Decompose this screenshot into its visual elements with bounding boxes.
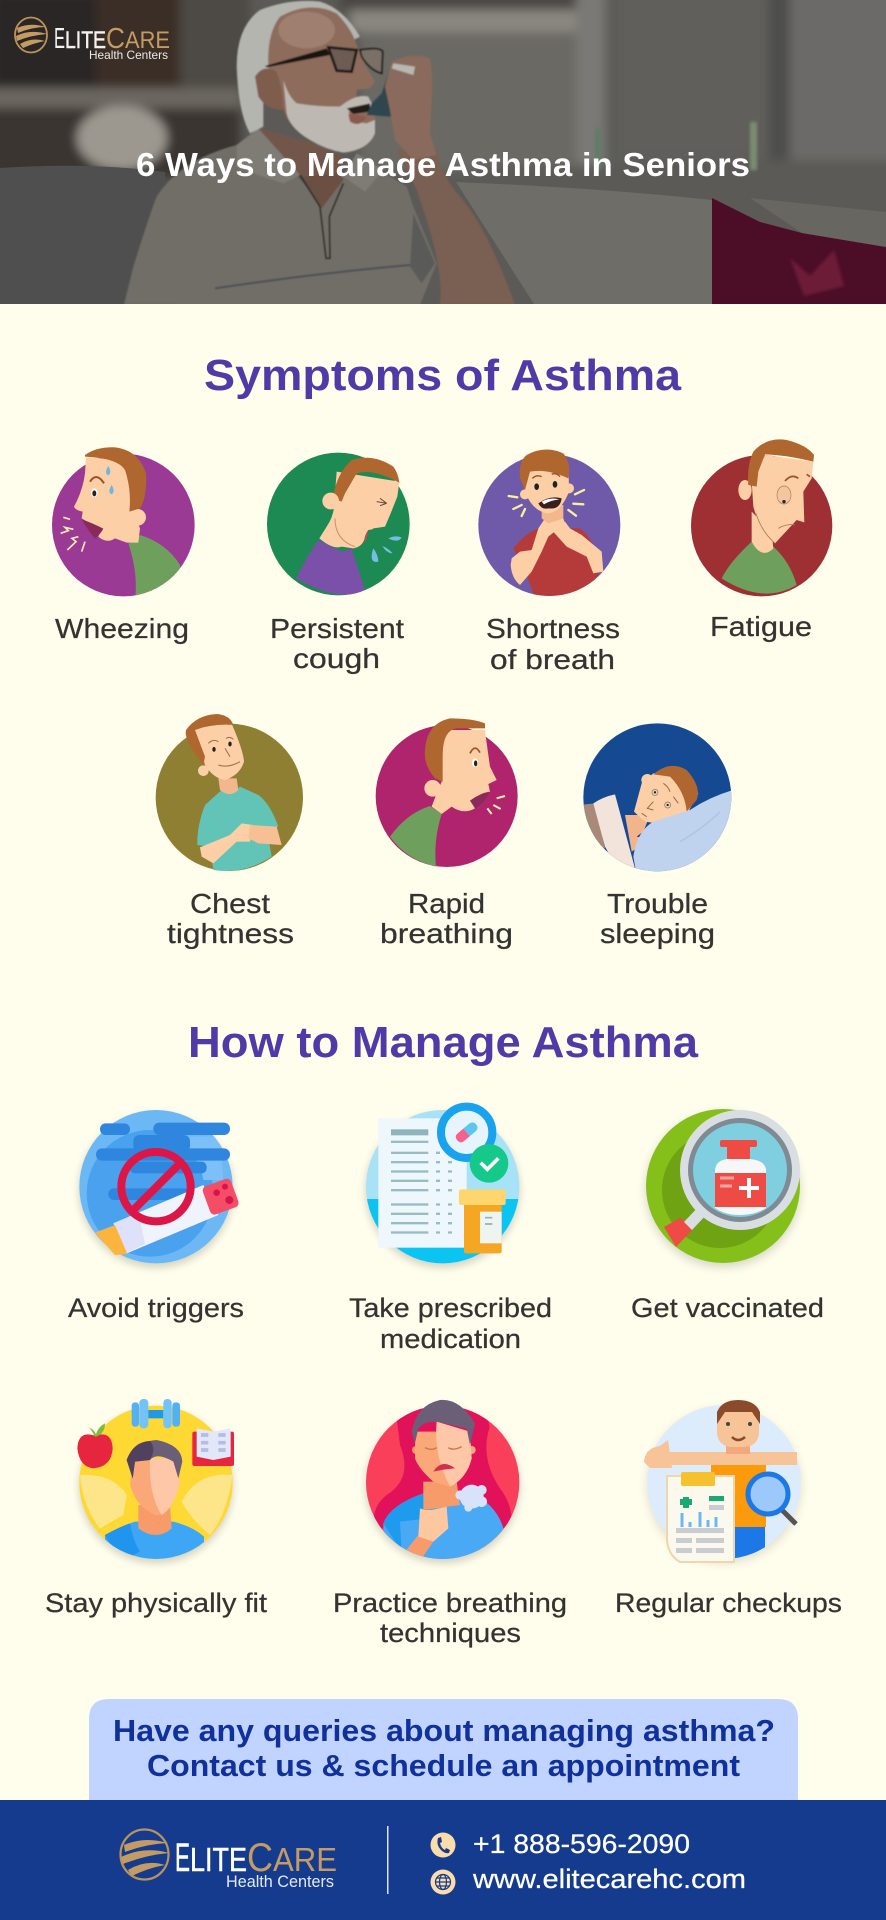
callout text: Contact us & schedule an appointment bbox=[147, 1748, 740, 1783]
logo: header EliteCare: ARE bbox=[125, 27, 170, 54]
phone number: +1 888-596-2090 bbox=[473, 1829, 690, 1859]
heading: How to Manage Asthma: How to Manage Asthma bbox=[188, 1018, 699, 1067]
logo: footer EliteCare: Health Centers bbox=[226, 1873, 334, 1891]
logo: footer EliteCare bbox=[120, 1830, 337, 1891]
logo: header EliteCare: LITE bbox=[65, 27, 106, 54]
symptom: shortness of breath bbox=[478, 450, 620, 675]
website: www.elitecarehc.com bbox=[472, 1864, 746, 1894]
label: Persistent cough: cough bbox=[293, 643, 380, 674]
tip: take prescribed medication bbox=[349, 1107, 552, 1354]
symptom: fatigue bbox=[691, 439, 832, 642]
callout: contact banner bbox=[89, 1699, 798, 1800]
logo: footer EliteCare: LITE bbox=[190, 1841, 247, 1878]
tip: regular checkups bbox=[615, 1400, 842, 1618]
label: Shortness of breath: of breath bbox=[490, 644, 615, 675]
tip: practice breathing techniques bbox=[333, 1400, 567, 1648]
label: Persistent cough: Persistent bbox=[270, 613, 404, 644]
icon: panting man bbox=[376, 718, 518, 867]
icon: man breathing bbox=[365, 1400, 520, 1564]
label: Fatigue: Fatigue bbox=[710, 611, 812, 642]
symptom: trouble sleeping bbox=[580, 723, 733, 949]
icon: coughing man bbox=[267, 453, 410, 595]
logo: header EliteCare: C bbox=[106, 23, 125, 55]
label: Trouble sleeping: sleeping bbox=[600, 918, 715, 949]
logo: footer EliteCare: E bbox=[175, 1836, 190, 1880]
label: Get vaccinated: Get vaccinated bbox=[631, 1293, 824, 1323]
label: Stay physically fit: Stay physically fit bbox=[45, 1588, 268, 1618]
tip: stay physically fit bbox=[45, 1399, 268, 1618]
label: Wheezing: Wheezing bbox=[55, 613, 189, 644]
logo: footer EliteCare: ARE bbox=[273, 1841, 337, 1878]
label: Practice breathing techniques: techniques bbox=[380, 1618, 521, 1648]
label: Regular checkups: Regular checkups bbox=[615, 1588, 842, 1618]
icon: tired man bbox=[691, 439, 832, 596]
icon: man with clipboard and magnifier bbox=[644, 1400, 801, 1565]
icon: wheezing man bbox=[52, 447, 195, 600]
callout text: Have any queries about managing asthma? bbox=[113, 1713, 775, 1748]
icon: sleepless man in bed bbox=[580, 723, 733, 875]
symptom: persistent cough bbox=[267, 453, 410, 674]
logo: header EliteCare: Health Centers bbox=[89, 48, 168, 62]
label: Avoid triggers: Avoid triggers bbox=[68, 1293, 244, 1323]
icon: vaccine under magnifier bbox=[646, 1109, 800, 1267]
tip: avoid triggers bbox=[68, 1110, 244, 1323]
label: Practice breathing techniques: Practice breathing bbox=[333, 1588, 567, 1618]
icon: prescription and pills bbox=[363, 1107, 523, 1268]
panel: footer bbox=[0, 1800, 886, 1920]
panel: header photo banner bbox=[0, 0, 886, 305]
heading: banner title: 6 Ways to Manage Asthma in Seniors bbox=[136, 146, 750, 183]
label: Rapid breathing: Rapid bbox=[408, 888, 485, 919]
heading: Symptoms of Asthma: Symptoms of Asthma bbox=[204, 351, 682, 400]
man figure bbox=[124, 1, 515, 305]
logo: header EliteCare bbox=[15, 18, 170, 62]
icon: phone bbox=[430, 1832, 456, 1858]
label: Take prescribed medication: Take prescribed bbox=[349, 1293, 552, 1323]
tip: get vaccinated bbox=[631, 1109, 824, 1323]
symptom: wheezing bbox=[52, 447, 195, 644]
icon: choking man bbox=[478, 450, 620, 598]
icon: no smoking bbox=[79, 1110, 240, 1268]
icon: chest pain man bbox=[156, 714, 303, 871]
label: Take prescribed medication: medication bbox=[380, 1324, 521, 1354]
logo: footer EliteCare: C bbox=[247, 1836, 273, 1880]
symptom: chest tightness bbox=[156, 714, 303, 949]
label: Chest tightness: tightness bbox=[167, 918, 294, 949]
logo: header EliteCare: E bbox=[54, 23, 65, 55]
label: Rapid breathing: breathing bbox=[380, 918, 513, 949]
label: Trouble sleeping: Trouble bbox=[607, 888, 708, 919]
label: Chest tightness: Chest bbox=[190, 888, 270, 919]
icon: fit man with dumbbell, apple, book bbox=[77, 1399, 234, 1564]
icon: globe bbox=[430, 1870, 456, 1894]
symptom: rapid breathing bbox=[376, 718, 518, 949]
sofa bbox=[0, 166, 175, 304]
label: Shortness of breath: Shortness bbox=[486, 613, 620, 644]
